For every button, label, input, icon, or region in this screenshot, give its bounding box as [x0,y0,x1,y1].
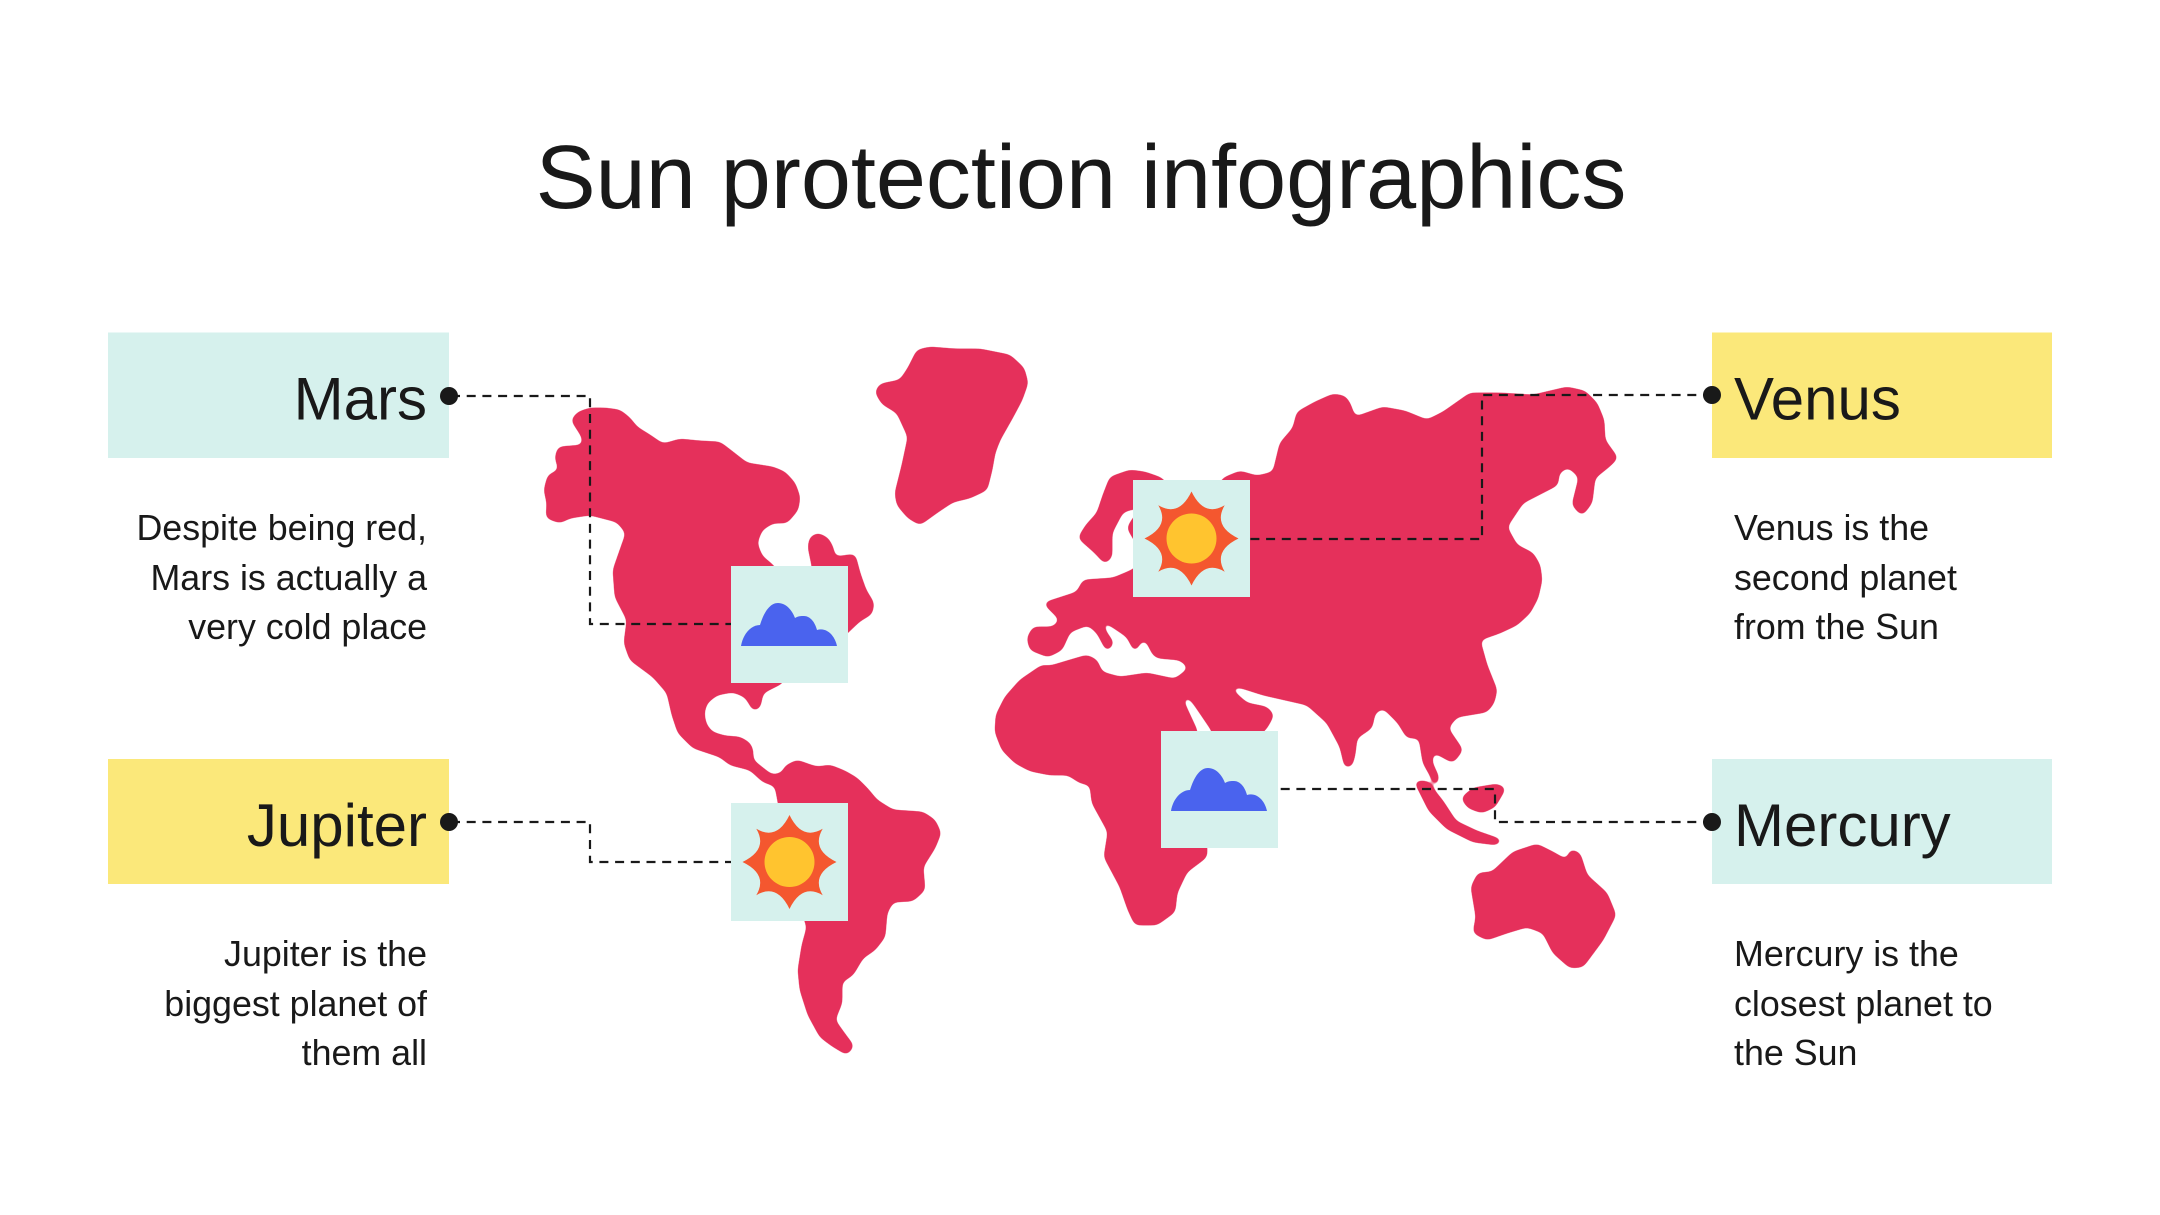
icon: cloud africa [1161,731,1278,848]
map: sumatra and java [1414,781,1503,845]
map: greenland [875,347,1028,525]
mars heading: Mars [294,366,427,432]
panel: mars [108,332,458,647]
map: eurasia and africa [995,387,1618,925]
map: australia [1471,844,1616,968]
mercury label box [1712,759,2052,884]
venus heading: Venus [1734,366,1901,432]
venus label box [1712,332,2052,458]
venus dot [1703,386,1721,404]
mars label box [108,332,449,458]
jupiter description: Jupiter is the [224,934,427,974]
icon: sun europe [1133,480,1250,597]
venus description: second planet [1734,558,1957,598]
map: newfoundland peninsula [808,533,874,640]
panel: mercury [1703,759,2052,1073]
map: borneo [1461,784,1506,813]
jupiter heading: Jupiter [247,792,427,859]
mars description: Mars is actually a [150,558,427,598]
mercury heading: Mercury [1734,792,1951,859]
panel: jupiter [108,759,458,1073]
mars description: very cold place [188,607,427,647]
mercury description: the Sun [1734,1033,1857,1073]
jupiter description: them all [302,1033,427,1073]
jupiter dot [440,813,458,831]
title: Sun protection infographics [536,128,1626,228]
icon: sun south america [731,803,848,921]
connector: jupiter [451,822,731,862]
jupiter label box [108,759,449,884]
panel: venus [1703,332,2052,647]
mars dot [440,387,458,405]
jupiter description: biggest planet of [164,984,427,1024]
connector: mars [451,396,731,624]
mercury description: closest planet to [1734,984,1993,1024]
connector: venus [1250,395,1712,539]
mercury dot [1703,813,1721,831]
mercury description: Mercury is the [1734,934,1959,974]
connector: mercury [1278,789,1712,822]
map: north and south america [544,408,941,1055]
venus description: Venus is the [1734,508,1929,548]
world map [544,347,1618,1055]
icon: cloud north america [731,566,848,683]
venus description: from the Sun [1734,607,1939,647]
mars description: Despite being red, [136,508,427,548]
